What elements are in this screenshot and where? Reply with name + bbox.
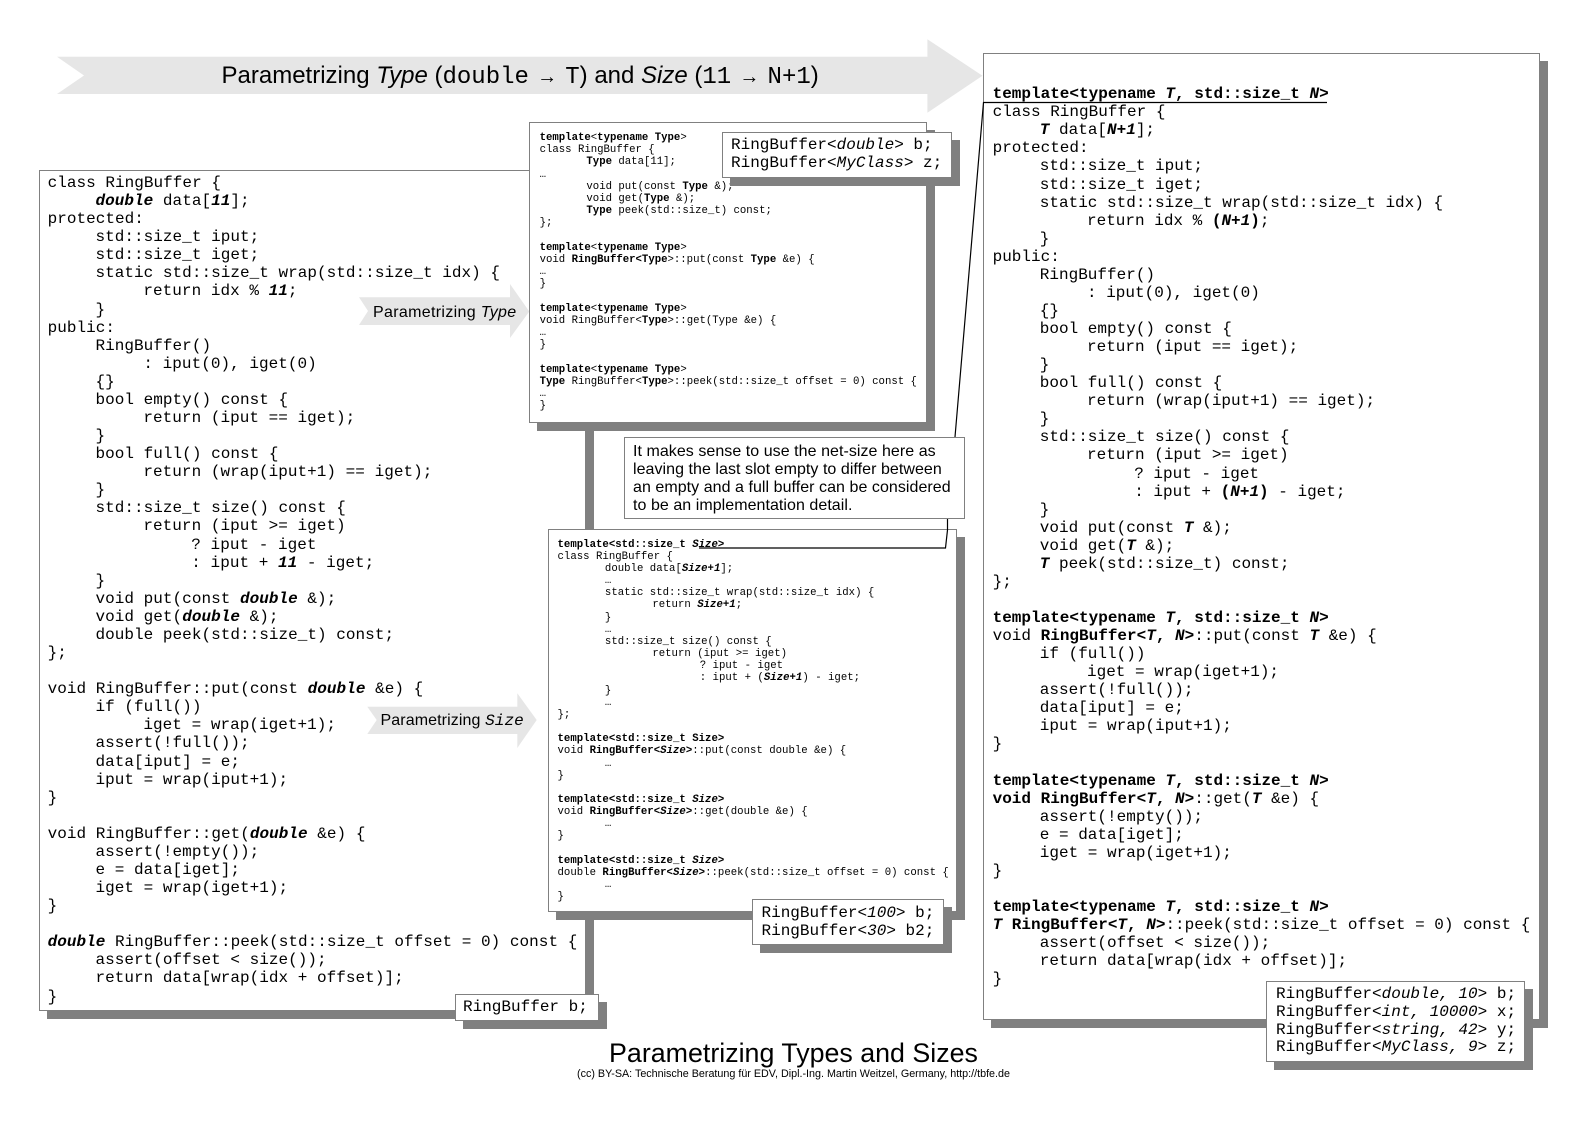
heading: parametrizing type and size: Parametrizing Type (double → T) and Size (11 → N+1) bbox=[222, 62, 819, 91]
code: typename template summary: template<typename Type> class RingBuffer { Type data[11]; … void put(const Type &); void get(Type &); Type peek(std::size_t) const; }; template<typename Type> void RingBuffer<Type>::put(const Type &e) { … } template<typename Type> void RingBuffer<Type>::get(Type &e) { … } template<typename Type> Type RingBuffer<Type>::peek(std::size_t offset = 0) const { … } bbox=[540, 132, 917, 412]
panel: size-parametrized template bbox=[548, 529, 957, 912]
callout: net-size note bbox=[624, 437, 965, 519]
snippet: combined instantiations bbox=[1266, 980, 1525, 1062]
credit line: (cc) BY-SA: Technische Beratung für EDV, Dipl.-Ing. Martin Weitzel, Germany, http://tbfe.de bbox=[577, 1068, 1010, 1080]
snippet: size instantiations bbox=[752, 899, 944, 945]
text: note body: It makes sense to use the net-size here as leaving the last slot empty to differ between an empty and a full buffer can be considered to be an implementation detail. bbox=[633, 442, 951, 514]
label: parametrizing type: Parametrizing Type bbox=[373, 304, 516, 321]
title: Parametrizing Types and Sizes bbox=[609, 1038, 978, 1068]
code: non-template class: class RingBuffer { double data[11]; protected: std::size_t iput; std::size_t iget; static std::size_t wrap(std::size_t idx) { return idx % 11; } public: RingBuffer() : iput(0), iget(0) {} bool empty() const { return (iput == iget); } bool full() const { return (wrap(iput+1) == iget); } std::size_t size() const { return (iput >= iget) ? iput - iget : iput + 11 - iget; } void put(const double &); void get(double &); double peek(std::size_t) const; }; void RingBuffer::put(const double &e) { if (full()) iget = wrap(iget+1); assert(!full()); data[iput] = e; iput = wrap(iput+1); } void RingBuffer::get(double &e) { assert(!empty()); e = data[iget]; iget = wrap(iget+1); } double RingBuffer::peek(std::size_t offset = 0) const { assert(offset < size()); return data[wrap(idx + offset)]; } bbox=[48, 174, 577, 1006]
panel: non-template RingBuffer code bbox=[39, 170, 586, 1011]
label: parametrizing size: Parametrizing Size bbox=[380, 712, 524, 730]
panel: combined template bbox=[983, 53, 1540, 1020]
code: size template summary: template<std::size_t Size> class RingBuffer { double data[Size+1]; … static std::size_t wrap(std::size_t idx) { return Size+1; } … std::size_t size() const { return (iput >= iget) ? iput - iget : iput + (Size+1) - iget; } … }; template<std::size_t Size> void RingBuffer<Size>::put(const double &e) { … } template<std::size_t Size> void RingBuffer<Size>::get(double &e) { … } template<std::size_t Size> double RingBuffer<Size>::peek(std::size_t offset = 0) const { … } bbox=[558, 539, 949, 903]
panel: type-parametrized template bbox=[529, 122, 927, 423]
code: RingBuffer double and MyClass: RingBuffer<double> b; RingBuffer<MyClass> z; bbox=[731, 136, 942, 172]
snippet: plain RingBuffer instantiation bbox=[454, 994, 598, 1021]
code: type and size template: template<typename T, std::size_t N> class RingBuffer { T data[N+1]; protected: std::size_t iput; std::size_t iget; static std::size_t wrap(std::size_t idx) { return idx % (N+1); } public: RingBuffer() : iput(0), iget(0) {} bool empty() const { return (iput == iget); } bool full() const { return (wrap(iput+1) == iget); } std::size_t size() const { return (iput >= iget) ? iput - iget : iput + (N+1) - iget; } void put(const T &); void get(T &); T peek(std::size_t) const; }; template<typename T, std::size_t N> void RingBuffer<T, N>::put(const T &e) { if (full()) iget = wrap(iget+1); assert(!full()); data[iput] = e; iput = wrap(iput+1); } template<typename T, std::size_t N> void RingBuffer<T, N>::get(T &e) { assert(!empty()); e = data[iget]; iget = wrap(iget+1); } template<typename T, std::size_t N> T RingBuffer<T, N>::peek(std::size_t offset = 0) const { assert(offset < size()); return data[wrap(idx + offset)]; } bbox=[993, 85, 1530, 988]
snippet: type instantiations bbox=[722, 132, 952, 178]
code: RingBuffer 100 and 30: RingBuffer<100> b; RingBuffer<30> b2; bbox=[762, 904, 934, 940]
code: four RingBuffer declarations: RingBuffer<double, 10> b; RingBuffer<int, 10000> x; RingBuffer<string, 42> y; RingBuffer<MyClass, 9> z; bbox=[1276, 985, 1516, 1056]
code: RingBuffer b: RingBuffer b; bbox=[463, 998, 588, 1016]
